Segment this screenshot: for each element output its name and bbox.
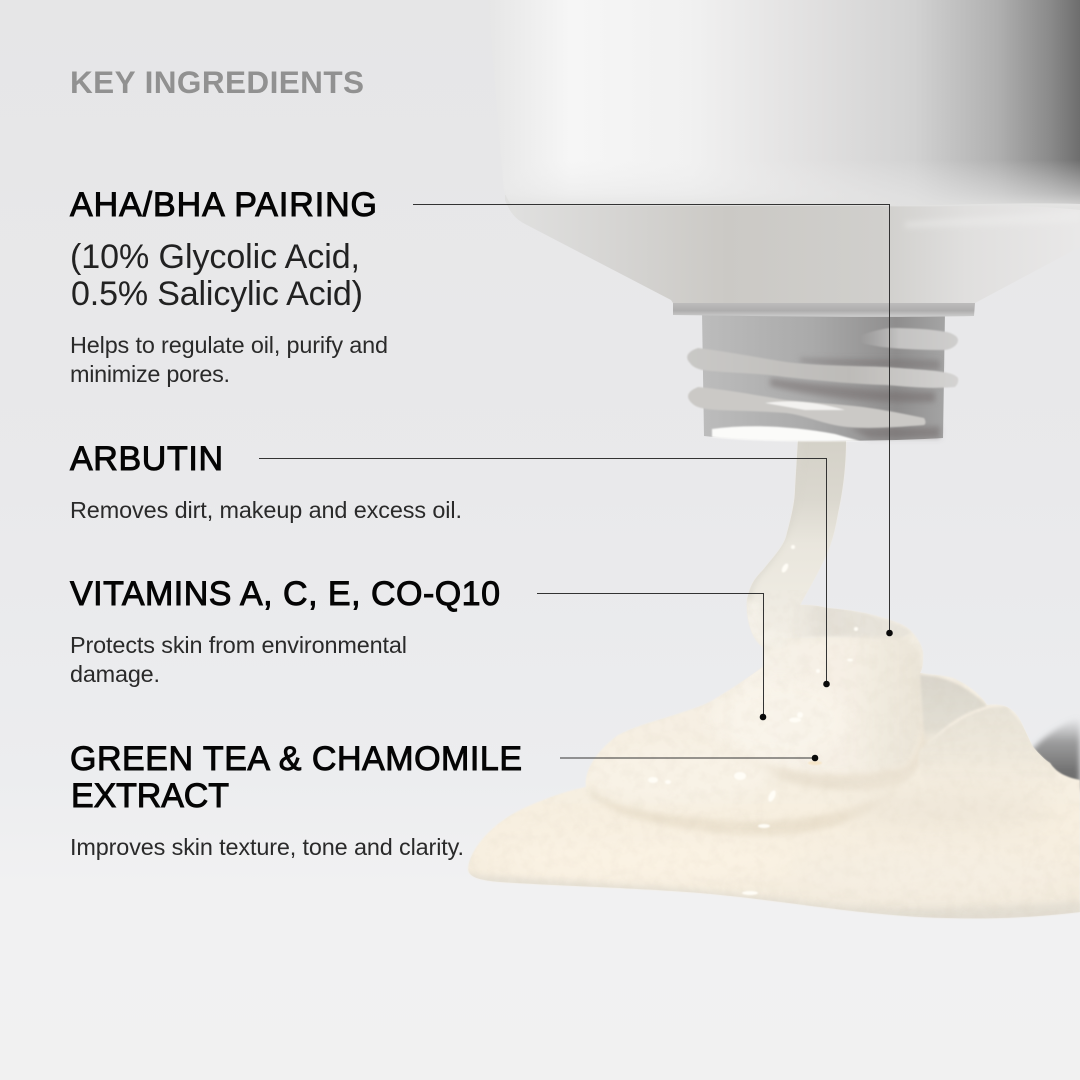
heading: AHA/BHA PAIRING (70, 186, 377, 224)
description: Helps to regulate oil, purify and (70, 332, 388, 358)
description: Improves skin texture, tone and clarity. (70, 834, 464, 860)
concentrations (70, 238, 363, 313)
tube neck (702, 312, 945, 441)
description: Removes dirt, makeup and excess oil. (70, 497, 462, 523)
heading: ARBUTIN (70, 440, 223, 478)
description: minimize pores. (70, 361, 230, 387)
cream dollop (460, 438, 1080, 925)
collar highlight (712, 426, 860, 441)
heading: GREEN TEA & CHAMOMILE (70, 740, 522, 778)
mound under-shadow (772, 731, 926, 790)
description (70, 332, 388, 387)
ingredient: AHA/BHA pairing (70, 186, 388, 387)
heading: VITAMINS A, C, E, CO-Q10 (70, 575, 500, 613)
ingredient: vitamins (70, 575, 500, 687)
neck shadows (770, 358, 940, 438)
tube body (488, 0, 1080, 205)
concentrations: 0.5% Salicylic Acid) (71, 275, 363, 313)
leader line: green tea (560, 755, 818, 761)
cast shadow on backdrop (1026, 716, 1080, 790)
description: damage. (70, 661, 160, 687)
description: Protects skin from environmental (70, 632, 407, 658)
tube shoulder (505, 195, 1080, 303)
coil inner band (811, 607, 907, 636)
tube threads (687, 328, 958, 441)
heading (70, 740, 522, 815)
glossy highlights (648, 545, 858, 895)
ingredient: green tea and chamomile (70, 740, 522, 860)
tube collar flange (673, 303, 975, 317)
leader line: AHA/BHA (413, 204, 893, 636)
leader line: arbutin (259, 458, 830, 687)
shoulder band highlight (905, 210, 1080, 228)
leader line: vitamins (537, 594, 766, 720)
concentrations: (10% Glycolic Acid, (70, 238, 360, 276)
title: key ingredients: KEY INGREDIENTS (70, 64, 364, 100)
tube (488, 0, 1080, 441)
ingredient: arbutin (70, 440, 462, 523)
back lobes (920, 674, 986, 738)
front mound (896, 648, 922, 762)
heading: EXTRACT (71, 777, 229, 815)
description (70, 632, 407, 687)
